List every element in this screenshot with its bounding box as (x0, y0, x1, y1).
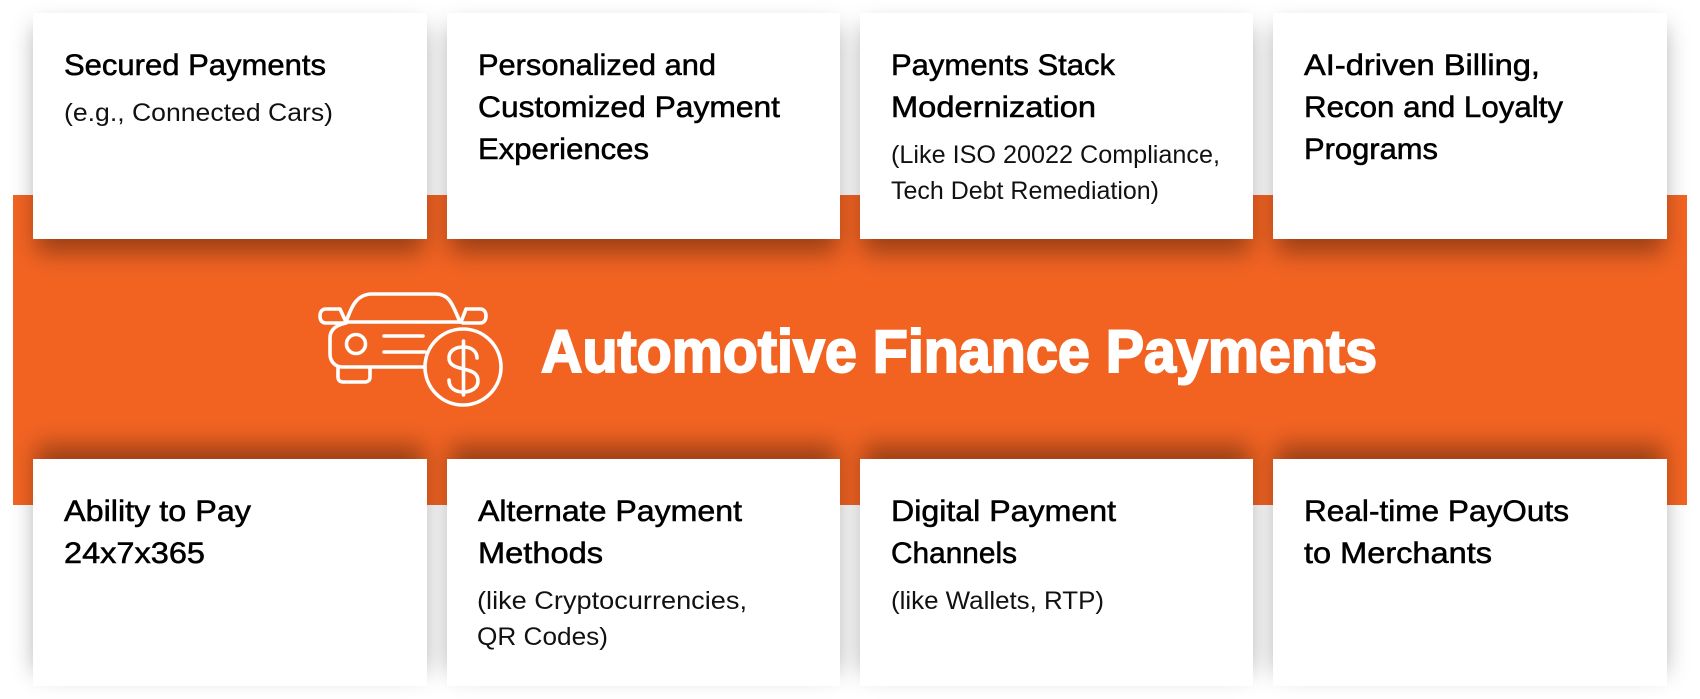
card: payments stack modernization: Modernization (891, 91, 1096, 124)
card: real-time payouts (1273, 459, 1667, 686)
card: real-time payouts: Real-time PayOuts (1304, 495, 1569, 528)
card: alternate payment methods: Alternate Payment (478, 495, 743, 528)
card: alternate payment methods: (like Cryptocurrencies, (477, 587, 747, 615)
card: real-time payouts: to Merchants (1304, 537, 1492, 570)
card: ability to pay: 24x7x365 (64, 537, 205, 570)
card: payments stack modernization: Tech Debt Remediation) (891, 177, 1159, 205)
card: ability to pay (33, 459, 427, 686)
card: secured payments: (e.g., Connected Cars) (64, 99, 333, 127)
card: payments stack modernization: Payments Stack (891, 49, 1116, 82)
card: personalized payment experiences (447, 13, 840, 239)
card: secured payments (33, 13, 427, 239)
card: payments stack modernization: (Like ISO 20022 Compliance, (891, 141, 1220, 169)
card: alternate payment methods: QR Codes) (477, 623, 608, 651)
card: digital payment channels (860, 459, 1253, 686)
card: alternate payment methods (447, 459, 840, 686)
card: AI-driven billing: Programs (1304, 133, 1438, 166)
card: ability to pay: Ability to Pay (64, 495, 251, 528)
central orange banner (13, 195, 1687, 505)
card: digital payment channels: Channels (891, 537, 1017, 570)
banner title: Automotive Finance Payments (541, 318, 1377, 385)
card: personalized payment experiences: Customized Payment (478, 91, 781, 124)
card: AI-driven billing: AI-driven Billing, (1304, 49, 1540, 82)
card: secured payments: Secured Payments (64, 49, 326, 82)
card: alternate payment methods: Methods (478, 537, 603, 570)
card: AI-driven billing (1273, 13, 1667, 239)
card: AI-driven billing: Recon and Loyalty (1304, 91, 1563, 124)
icon: car with dollar coin (320, 294, 501, 405)
card: digital payment channels: Digital Payment (891, 495, 1117, 528)
card: personalized payment experiences: Experiences (478, 133, 649, 166)
card: personalized payment experiences: Personalized and (478, 49, 716, 82)
card: payments stack modernization (860, 13, 1253, 239)
card: digital payment channels: (like Wallets, RTP) (891, 587, 1104, 615)
